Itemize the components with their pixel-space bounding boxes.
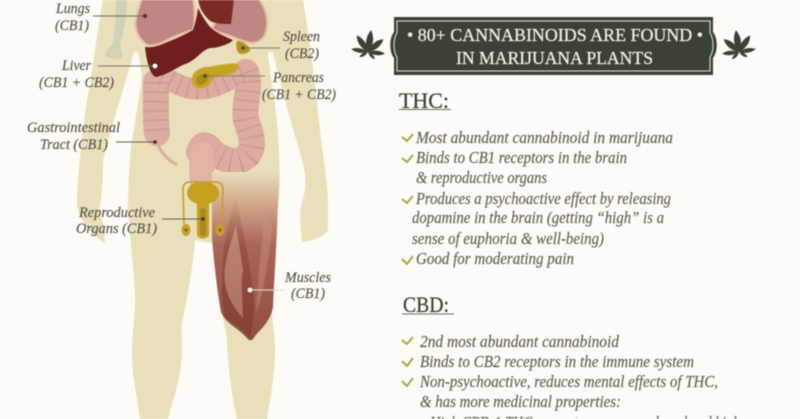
label: liver: (CB1 + CB2): [39, 75, 114, 91]
heading: CBD: CBD:: [403, 292, 449, 317]
label: spleen: Spleen: [283, 29, 320, 45]
list: THC facts: Produces a psychoactive effect by releasing: [415, 189, 671, 208]
label: reproductive organs: [76, 205, 205, 237]
list: CBD facts: 2nd most abundant cannabinoid: [420, 332, 620, 351]
title banner: [390, 17, 717, 75]
organ: colon: [156, 72, 252, 190]
label: liver: [39, 58, 157, 91]
organ: reproductive: [182, 182, 224, 238]
list: CBD facts: Non-psychoactive, reduces mental effects of THC,: [419, 372, 718, 391]
label: muscles: [248, 270, 331, 302]
list: THC facts: & reproductive organs: [416, 168, 547, 187]
label: lungs: Lungs: [55, 1, 90, 17]
icon: cannabis leaf left: [350, 28, 388, 62]
human body silhouette: [77, 0, 328, 419]
organ: pancreas: [192, 64, 239, 88]
organ: lungs: [135, 0, 267, 45]
label: reproductive organs: Reproductive: [78, 205, 156, 221]
label: muscles: Muscles: [284, 270, 331, 286]
list: THC facts: Good for moderating pain: [416, 249, 574, 268]
label: gastrointestinal tract: Tract (CB1): [40, 137, 108, 153]
label: spleen: (CB2): [285, 46, 319, 62]
label: liver: Liver: [61, 58, 91, 74]
list: CBD facts: [402, 332, 740, 419]
organ: spleen: [236, 41, 250, 54]
label: pancreas: [203, 70, 336, 103]
organ: heart: [198, 0, 234, 24]
list: THC facts: sense of euphoria & well-being): [412, 229, 604, 248]
list: THC facts: dopamine in the brain (getting “high” is a: [412, 208, 664, 227]
heading: THC: THC:: [399, 88, 449, 113]
label: pancreas: (CB1 + CB2): [262, 87, 336, 103]
label: reproductive organs: Organs (CB1): [76, 221, 157, 237]
label: gastrointestinal tract: Gastrointestinal: [27, 120, 120, 136]
organ: liver: [145, 8, 233, 77]
label: lungs: (CB1): [55, 18, 89, 34]
label: spleen: [241, 29, 320, 62]
label: lungs: [55, 1, 147, 34]
label: muscles: (CB1): [291, 286, 325, 302]
label: pancreas: Pancreas: [272, 70, 324, 86]
list: THC facts: Binds to CB1 receptors in the brain: [416, 148, 627, 167]
bone: humerus: [105, 0, 127, 59]
list: THC facts: Most abundant cannabinoid in marijuana: [415, 128, 673, 147]
list: THC facts: [402, 128, 673, 268]
title banner: IN MARIJUANA PLANTS: [456, 48, 653, 68]
title banner: • 80+ CANNABINOIDS ARE FOUND •: [407, 25, 703, 45]
list: CBD facts: Binds to CB2 receptors in the immune system: [420, 352, 694, 371]
label: gastrointestinal tract: [27, 120, 157, 153]
organ: thigh muscles: [212, 172, 280, 340]
icon: cannabis leaf right: [719, 28, 757, 62]
list: CBD facts: & has more medicinal properties:: [420, 392, 621, 411]
